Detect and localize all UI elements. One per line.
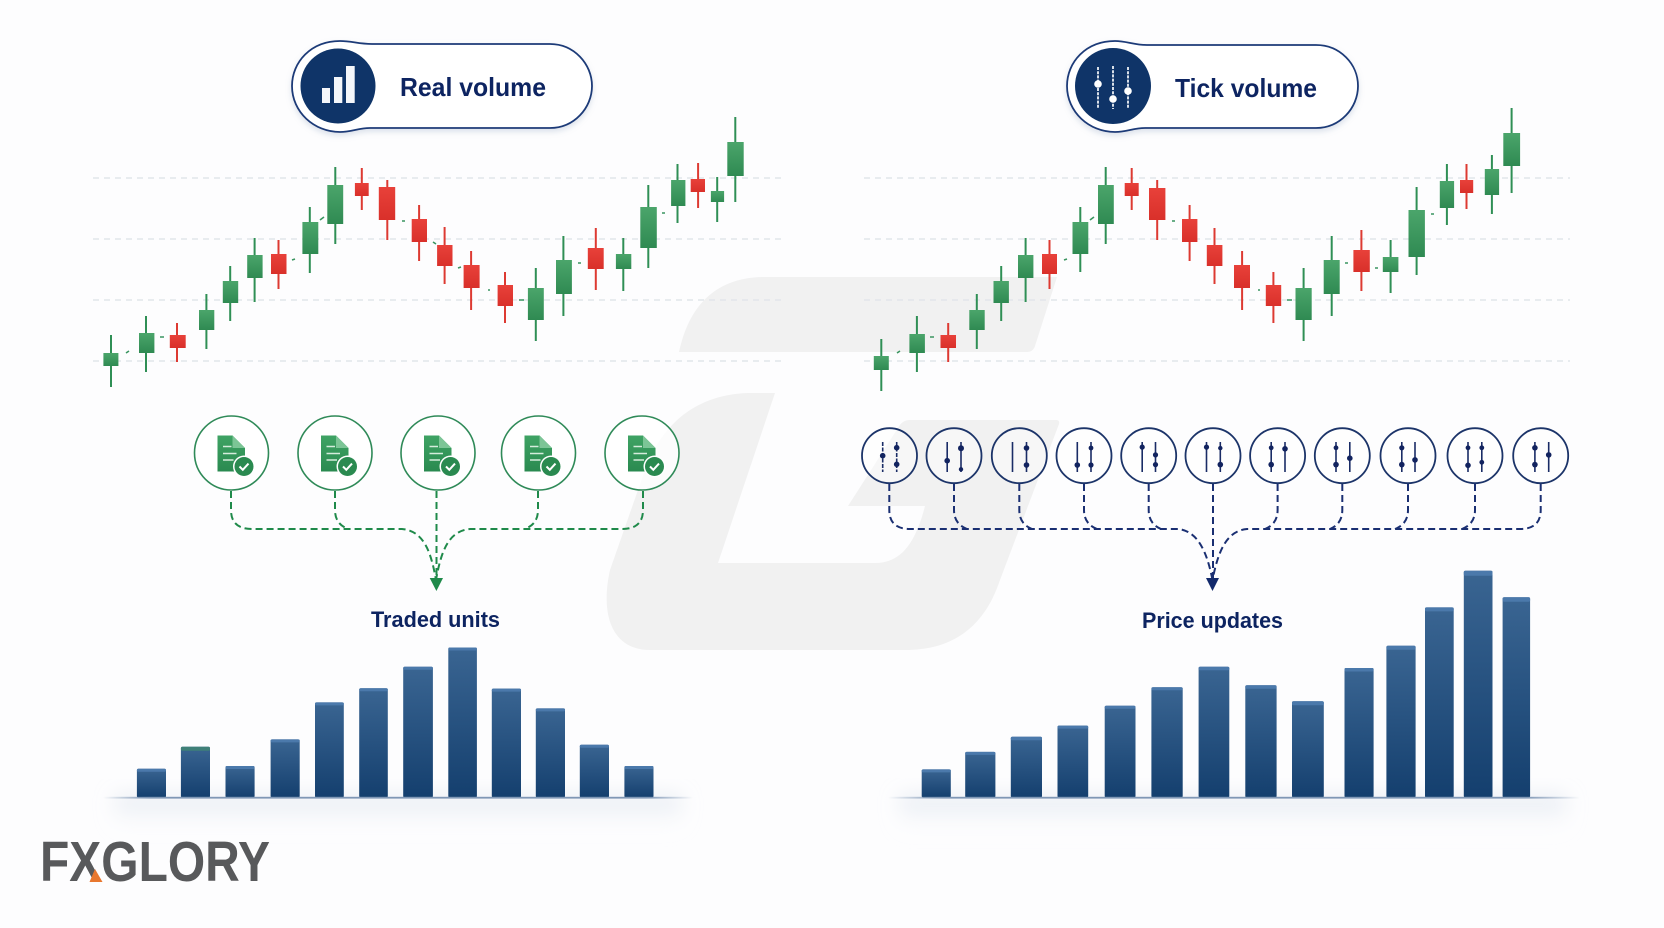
heading pill: real volume: Real volume (400, 72, 546, 102)
icon: document check 1 (194, 416, 268, 490)
candlestick chart: real volume (103, 117, 744, 387)
tick slider icons row (862, 428, 1568, 483)
icon: sliders 4 (1056, 428, 1112, 483)
bar chart: price updates (888, 571, 1580, 832)
price grid lines (93, 178, 782, 361)
bar chart: traded units (103, 648, 693, 830)
price grid lines (864, 178, 1570, 361)
icon: document check 2 (298, 416, 372, 490)
arrow: dashed green connectors to traded units (231, 491, 643, 591)
icon: sliders 7 (1250, 428, 1305, 483)
icon: sliders 10 (1448, 428, 1502, 483)
candlestick chart: tick volume (874, 108, 1520, 391)
icon: sliders 6 (1186, 428, 1240, 483)
arrow: dashed navy connectors to price updates (889, 484, 1541, 591)
icon: document check 5 (605, 416, 679, 490)
heading pill: tick volume (1067, 41, 1358, 132)
icon: document check 3 (401, 416, 475, 490)
background watermark logo (607, 277, 1059, 650)
heading pill: real volume (292, 41, 592, 132)
panel: real volume (93, 41, 782, 830)
panel: tick volume (862, 41, 1580, 832)
icon: sliders 2 (926, 428, 982, 483)
icon: document check 4 (502, 416, 576, 490)
label: price updates: Price updates (1142, 608, 1283, 633)
label: traded units: Traded units (371, 607, 500, 632)
heading pill: tick volume: Tick volume (1175, 73, 1317, 103)
logo: FXGLORY: FXGLORY (40, 830, 270, 894)
icon: sliders 3 (992, 428, 1047, 483)
icon: sliders 9 (1380, 428, 1436, 483)
trade document icons row (194, 416, 679, 490)
icon: sliders 1 (862, 428, 917, 483)
icon: sliders 11 (1513, 428, 1568, 483)
icon: sliders 5 (1121, 428, 1176, 483)
icon: sliders 8 (1315, 428, 1370, 483)
